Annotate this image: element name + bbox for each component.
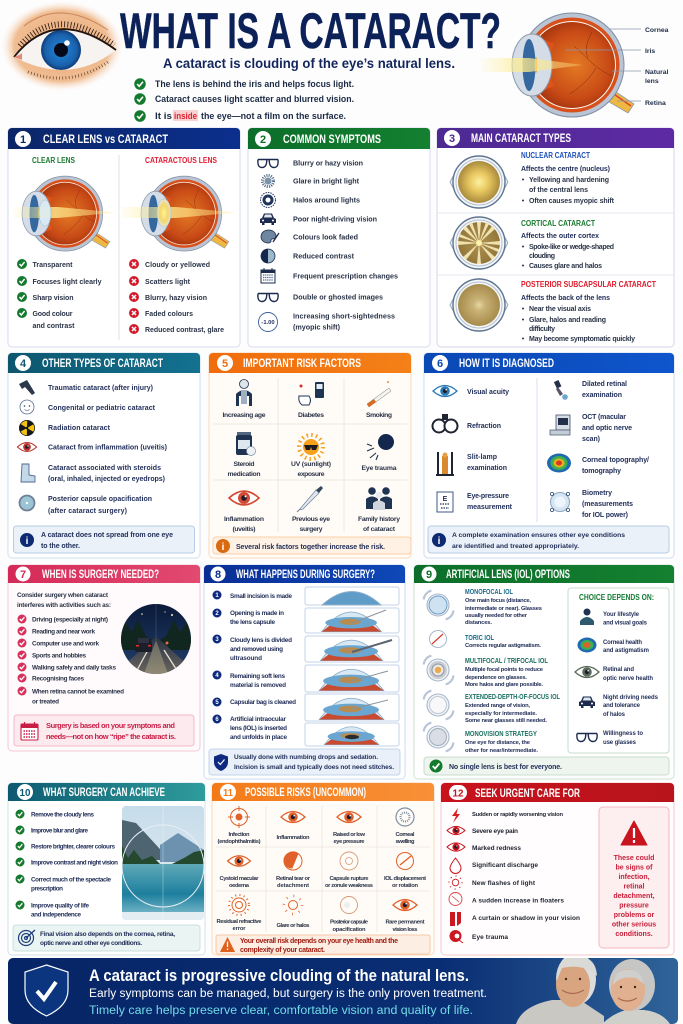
posterior subcapsular cataract: May become symptomatic quickly [529,336,635,343]
diagnosis labels: Slit-lamp [467,454,497,461]
diagnosis icons: E [443,496,448,503]
warning box: retinal [623,884,645,890]
warning box [599,807,669,948]
posterior subcapsular cataract: Near the visual axis [529,306,591,313]
risk factor labels: (uveitis) [232,526,256,533]
benefits checklist: Improve blur and glare [31,828,88,834]
choice depends on box: use glasses [603,740,637,746]
step text: and removed using [230,646,283,653]
choice depends on box: CHOICE DEPENDS ON: [579,593,654,602]
cortical cataract [450,217,614,270]
risk factor labels [222,412,400,533]
symptom list: (myopic shift) [293,322,341,332]
risk labels: Raised or low [333,832,365,838]
benefits checklist [16,810,118,918]
diagnosis labels: Visual acuity [467,389,509,396]
surgery step images [305,587,399,746]
nuclear cataract: Yellowing and hardening [529,177,609,184]
step text: Artificial intraocular [230,716,286,723]
diagnosis labels: examination [582,392,622,399]
lens option text: intermediate or near). Glasses [465,606,542,612]
nuclear cataract: Affects the centre (nucleus) [521,166,610,173]
risk labels: Inflammation [276,835,310,841]
panel 2: common symptoms: COMMON SYMPTOMS [283,132,381,146]
header: labelled eye anatomy diagram: Cornea [645,27,669,34]
activity checklist: Reading and near work [32,628,95,636]
risk labels: oedema [229,883,250,889]
benefits checklist: Remove the cloudy lens [31,812,94,818]
choice depends on box: and astigmatism [603,648,649,654]
callout: does not spread [14,526,194,553]
risk labels: swelling [396,839,415,845]
cortical cataract: clouding [529,253,555,260]
lens option text [465,587,560,754]
urgent symptom list: Significant discharge [472,862,538,869]
risk factor icons [229,380,394,512]
mountain lake photo [122,806,204,920]
risk factor labels: medication [228,471,260,478]
callout: numbing drops [209,749,400,775]
banner text: A cataract is progressive clouding of the natural lens. [89,966,469,985]
panel 12: seek urgent care: 12 [452,788,464,800]
choice depends on box: and visual goals [603,620,648,626]
step text [230,593,296,741]
night driving scene [121,604,191,674]
lens option text: especially for intermediate. [465,711,537,717]
symptom icons: -1.00 [261,320,275,326]
urgent symptom list: Severe eye pain [472,828,518,835]
panel 10: what surgery can achieve: 10 [20,787,31,799]
step text: lens (IOL) is inserted [230,725,287,732]
header bullet list: the eye—not a film on the surface. [201,111,346,121]
panel 11: possible risks [212,783,434,955]
diagnosis labels [467,381,649,519]
panel 12: seek urgent care [441,783,674,955]
type list: (oral, inhaled, injected or eyedrops) [48,476,165,483]
lens option text: dependence on glasses. [465,675,527,681]
header: labelled eye anatomy diagram: Natural [645,69,669,76]
symptom list: Colours look faded [293,232,358,242]
clear lens column: and contrast [32,323,75,330]
callout: symptoms not ripeness: needs—not on how “ripe” the cataract is. [46,732,176,741]
activity checklist: When retina cannot be examined [32,688,124,696]
panel 3: main cataract types: MAIN CATARACT TYPES [471,133,571,145]
type list: Congenital or pediatric cataract [48,405,156,412]
cataractous lens column: Faded colours [145,311,193,318]
callout: does not spread: A cataract does not spread from one eye [41,532,173,539]
header: eye photograph illustration [1,1,123,91]
nuclear cataract: of the central lens [529,187,588,194]
type list [48,385,167,515]
panel 8: what happens during surgery: 8 [215,569,221,581]
warning box: problems or [614,912,655,919]
choice depends on box: of halos [603,712,626,718]
step numbers: 6 [215,717,219,723]
header: labelled eye anatomy diagram [481,13,669,117]
clear lens column [13,156,116,330]
panel 6: how it is diagnosed [424,353,674,558]
panel 5: important risk factors: 5 [222,358,228,370]
panel 8: what happens during surgery [204,565,405,779]
lens option text: TORIC IOL [465,633,494,642]
step text: Capsular bag is cleaned [230,699,296,706]
panel 1: clear lens vs cataract: CLEAR LENS vs CATARACT [43,132,169,146]
panel 4: other types of cataract: 4 [20,358,27,370]
lens option text: Multiple focal points to reduce [465,667,544,673]
callout: overall risk: Your overall risk depends on your eye health and the [240,938,398,945]
bottom banner [8,953,678,1024]
nuclear cataract: Often causes myopic shift [529,198,615,205]
benefits checklist: and independence [31,912,81,918]
diagnosis labels: and optic nerve [582,425,632,432]
clear lens column: Transparent [32,262,73,269]
panel 8: what happens during surgery: WHAT HAPPENS DURING SURGERY? [236,569,375,581]
cataractous lens column: Cloudy or yellowed [145,262,210,269]
banner text: Timely care helps preserve clear, comfortable vision and quality of life. [89,1005,473,1017]
callout: no single lens [424,757,669,775]
type list: Cataract from inflammation (uveitis) [48,444,167,452]
choice depends on box: Your lifestyle [603,612,640,618]
panel 7: when is surgery needed [8,565,200,751]
benefits checklist: Improve contrast and night vision [31,860,118,866]
panel 3: main cataract types [437,128,674,347]
diagnosis labels: Biometry [582,490,612,497]
cataractous lens column: CATARACTOUS LENS [145,156,218,165]
lens option text: More halos and glare possible. [465,682,543,688]
activity checklist [18,614,124,706]
symptom list [293,158,398,332]
panel 1: clear lens vs cataract [8,128,240,347]
symptom list: Glare in bright light [293,176,360,186]
intro text [17,592,111,609]
couple portrait [516,953,670,1024]
symptom list: Blurry or hazy vision [293,158,363,168]
panel 9: artificial lens options [414,565,674,779]
diagnosis labels: Corneal topography/ [582,457,649,464]
choice depends on box: Retinal and [603,667,634,673]
diagnosis labels: for IOL power) [582,512,628,519]
risk labels: or rotation [392,883,418,889]
lens option text: One eye for distance, the [465,740,531,746]
choice depends on box: Willingness to [603,731,643,737]
warning box: other serious [612,922,656,928]
posterior subcapsular cataract: Glare, halos and reading [529,317,606,324]
risk factor labels: of cataract [363,526,396,533]
lens option text: other for near/intermediate. [465,748,538,754]
lens option text: One main focus (distance, [465,598,531,604]
risk factor labels: Family history [358,516,400,523]
panel 7: when is surgery needed: 7 [20,569,26,581]
step text: Cloudy lens is divided [230,637,292,644]
panel 10: what surgery can achieve: WHAT SURGERY CAN ACHIEVE [43,787,165,799]
panel 5: important risk factors [209,353,411,558]
urgent symptom list: A curtain or shadow in your vision [472,915,580,922]
callout: final vision [13,925,200,951]
warning box: infection, [618,874,650,881]
warning box: be signs of [616,864,653,872]
lens option text: MONOVISION STRATEGY [465,729,537,738]
cataractous lens column: Blurry, hazy vision [145,295,207,302]
intro text: Consider surgery when cataract [17,592,109,599]
warning box: These could [614,855,654,862]
panel 2: common symptoms [248,128,430,347]
urgent symptom list: Eye trauma [472,934,508,941]
activity checklist: Driving (especially at night) [32,616,108,624]
risk labels: Corneal [396,832,415,838]
cataractous lens column: Reduced contrast, glare [145,327,224,334]
choice depends on box: Night driving needs [603,695,659,701]
type list: (after cataract surgery) [48,508,127,515]
step numbers: 1 [215,593,219,599]
callout: numbing drops: Usually done with numbing drops and sedation. [234,754,378,761]
risk labels: Posterior capsule [330,920,369,926]
diagnosis labels: Eye-pressure [467,493,509,500]
panel 10: what surgery can achieve [8,783,205,955]
risk labels: Infection [228,832,250,838]
callout: complete examination: i [438,536,441,547]
panel 11: possible risks: POSSIBLE RISKS (UNCOMMON) [245,787,366,799]
risk factor labels: Inflammation [224,516,264,523]
step text: Remaining soft lens [230,673,285,680]
callout: no single lens: No single lens is best for everyone. [449,764,562,771]
choice depends on box: Corneal health [603,640,642,646]
type list: Posterior capsule opacification [48,496,152,503]
risk labels: Residual refractive [216,919,262,925]
risk labels: opacification [332,927,366,933]
urgent symptom list: A sudden increase in floaters [472,898,564,904]
urgent icons [447,808,465,943]
activity checklist: Recognising faces [32,676,84,682]
risk labels: vision loss [392,927,418,933]
symptom list: Frequent prescription changes [293,272,398,280]
icon: shield [25,965,68,1016]
risk factor labels: UV (sunlight) [291,461,331,468]
subtitle: A cataract is clouding of the eye’s natural lens. [163,56,455,71]
lens option text: usually needed for other [465,613,528,619]
lens option text: Corrects regular astigmatism. [465,643,541,649]
activity checklist: Walking safely and daily tasks [32,664,116,672]
symptom list: Poor night-driving vision [293,214,377,224]
cortical cataract: Causes glare and halos [529,263,602,270]
panel 1: clear lens vs cataract: 1 [20,134,26,146]
risk labels: Cystoid macular [220,876,259,882]
benefits checklist: Restore brighter, clearer colours [31,844,115,850]
panel 9: artificial lens options: 9 [426,569,432,581]
diagnosis labels: measurement [467,504,513,511]
callout: does not spread: i [26,536,29,547]
risk labels: (endophthalmitis) [218,839,261,845]
nuclear cataract: NUCLEAR CATARACT [521,151,590,160]
symptom list: Increasing short-sightedness [293,312,395,320]
urgent symptom list: Marked redness [472,845,521,852]
risk factor labels: exposure [298,471,325,478]
diagnosis icons [432,380,571,512]
cortical cataract: Affects the outer cortex [521,233,599,240]
diagnosis labels: scan) [582,436,600,443]
type list: Cataract associated with steroids [48,465,161,472]
warning box: conditions. [615,931,653,938]
benefits checklist: prescription [31,886,63,892]
header bullet list: Cataract causes light scatter and blurred vision. [155,94,354,104]
lens icons [424,591,453,751]
panel 11: possible risks: 11 [223,787,233,799]
header bullet list [134,78,354,122]
type list: Radiation cataract [48,425,111,432]
risk icons [228,806,417,915]
header bullet list: It is [155,111,172,121]
benefits checklist: Correct much of the spectacle [31,876,111,884]
step text: Opening is made in [230,610,284,617]
risk labels: IOL displacement [384,876,426,882]
warning box: pressure [619,902,649,910]
activity checklist: or treated [32,698,59,706]
panel 4: other types of cataract: OTHER TYPES OF CATARACT [42,358,163,370]
step numbers: 4 [215,673,219,679]
warning box: detachment, [613,893,655,900]
callout: several risk factors [213,537,411,554]
type icons [17,380,37,510]
risk factor labels: Steroid [234,461,254,468]
step numbers [212,590,222,724]
panel 3: main cataract types: 3 [449,133,455,145]
panel 9: artificial lens options: ARTIFICIAL LENS (IOL) OPTIONS [446,569,570,581]
lens option text: MULTIFOCAL / TRIFOCAL IOL [465,656,548,665]
callout: overall risk [216,935,430,954]
risk factor labels: Eye trauma [362,465,397,472]
callout: symptoms not ripeness [14,715,194,746]
activity checklist: Sports and hobbies [32,652,86,660]
panel 5: important risk factors: IMPORTANT RISK FACTORS [243,356,361,370]
title: WHAT IS A CATARACT? [120,3,501,59]
callout: final vision: Final vision also depends on the cornea, retina, [40,931,175,938]
posterior subcapsular cataract: difficulty [529,326,555,333]
risk factor labels: Diabetes [298,412,324,419]
diagnosis labels: (measurements [582,501,633,508]
step numbers: 2 [215,611,219,617]
symptom list: Halos around lights [293,196,360,204]
clear lens column: Sharp vision [32,295,74,302]
nuclear cataract [450,151,615,208]
clear lens column: CLEAR LENS [32,156,76,165]
symptom list: Reduced contrast [293,252,355,260]
choice depends on box: optic nerve health [603,676,653,682]
callout: complete examination [428,526,669,553]
lens option text: MONOFOCAL IOL [465,587,513,596]
header: labelled eye anatomy diagram: Retina [645,100,666,107]
callout: complete examination: A complete examination ensures other eye conditions [452,532,625,539]
risk factor labels: Previous eye [292,516,330,523]
panel 7: when is surgery needed: WHEN IS SURGERY NEEDED? [42,569,159,581]
symptom list: Double or ghosted images [293,292,383,302]
type list: Traumatic cataract (after injury) [48,385,153,392]
posterior subcapsular cataract: POSTERIOR SUBCAPSULAR CATARACT [521,280,656,289]
panel 12: seek urgent care: SEEK URGENT CARE FOR [475,786,580,800]
callout: final vision: optic nerve and other eye conditions. [40,940,142,947]
step text: and unfolds in place [230,734,287,741]
risk labels: Rare permanent [386,920,425,926]
panel 6: how it is diagnosed: 6 [437,358,443,370]
banner text [89,966,487,1017]
callout: does not spread: to the other. [41,543,80,550]
urgent symptom list: Sudden or rapidly worsening vision [472,812,563,818]
step numbers: 3 [215,637,219,643]
posterior subcapsular cataract: Affects the back of the lens [521,295,610,302]
lens option text: EXTENDED-DEPTH-OF-FOCUS IOL [465,692,560,701]
posterior subcapsular cataract [450,279,656,343]
step text: material is removed [230,682,286,689]
risk labels: error [232,926,246,932]
step text: ultrasound [230,655,262,662]
symptom icons [258,160,279,332]
risk labels: Capsule rupture [330,876,369,882]
urgent symptom list [472,812,580,941]
step text: Small incision is made [230,593,292,600]
cortical cataract: Spoke-like or wedge-shaped [529,244,614,251]
risk labels: eye pressure [334,839,365,845]
callout: numbing drops: Incision is small and typically does not need stitches. [234,764,394,771]
risk labels: detachment [277,883,309,889]
banner text: Early symptoms can be managed, but surgery is the only proven treatment. [89,988,487,1000]
cataractous lens column [121,156,236,334]
benefits checklist: Improve quality of life [31,902,89,910]
clear lens column: Good colour [32,311,73,318]
clear lens column: Focuses light clearly [32,279,102,286]
diagnosis labels: Dilated retinal [582,381,627,388]
callout: several risk factors: Several risk factors together increase the risk. [236,544,385,551]
activity checklist: Computer use and work [32,640,99,648]
risk factor labels: Smoking [366,412,392,419]
risk labels: Retinal tear or [276,876,311,882]
header: labelled eye anatomy diagram: lens [645,78,659,85]
diagnosis labels: tomography [582,468,621,475]
risk factor labels: surgery [300,526,323,533]
panel 4: other types of cataract [8,353,200,558]
risk labels [216,832,426,933]
step numbers: 5 [215,700,219,706]
header bullet list: inside [174,111,197,121]
risk labels: Glare or halos [276,923,310,929]
diagnosis labels: Refraction [467,423,501,430]
risk factor labels: Increasing age [222,412,266,419]
lens option text: distances. [465,620,492,626]
header: labelled eye anatomy diagram: Iris [645,48,655,55]
cataractous lens column: Scatters light [145,279,191,286]
callout: several risk factors: i [222,542,225,553]
diagnosis labels: OCT (macular [582,414,626,421]
panel 6: how it is diagnosed: HOW IT IS DIAGNOSED [459,358,554,370]
callout: overall risk: complexity of your cataract. [240,947,325,954]
header bullet list: The lens is behind the iris and helps focus light. [155,79,354,89]
cortical cataract: CORTICAL CATARACT [521,219,595,228]
choice depends on box: and tolerance [603,703,641,709]
step text: the lens capsule [230,619,275,626]
risk labels: or zonule weakness [325,883,373,889]
lens option text: Some near glasses still needed. [465,718,547,724]
intro text: interferes with activities such as: [17,602,111,609]
choice depends on box [568,588,669,753]
callout: complete examination: are identified and treated appropriately. [452,543,579,550]
callout: symptoms not ripeness: Surgery is based on your symptoms and [46,721,175,730]
lens option text: Extended range of vision, [465,703,530,709]
panel 2: common symptoms: 2 [260,134,266,146]
urgent symptom list: New flashes of light [472,880,536,887]
diagnosis labels: examination [467,465,507,472]
